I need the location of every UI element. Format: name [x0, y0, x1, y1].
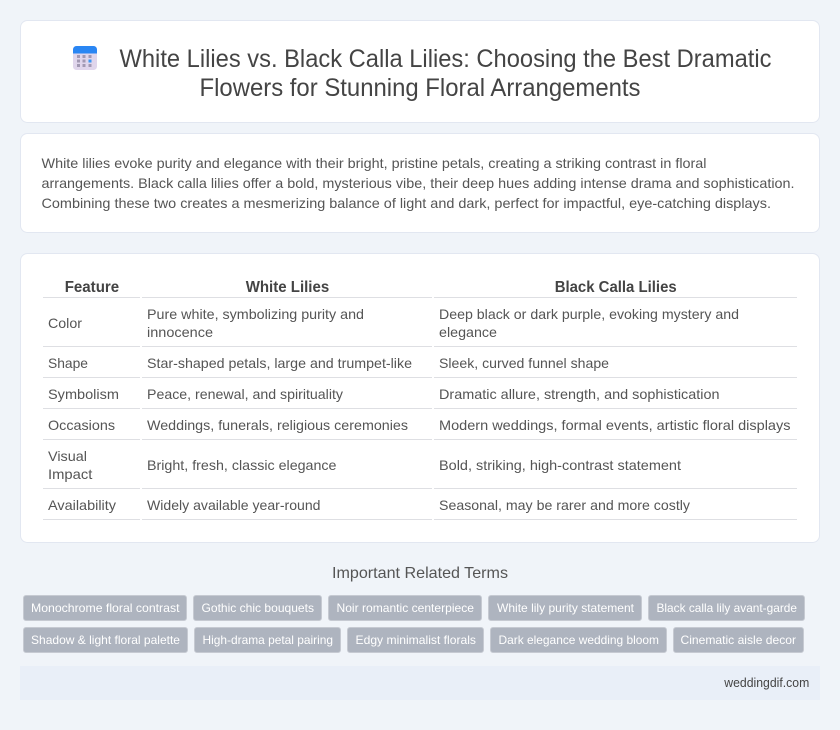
row: color: elegance	[439, 324, 497, 340]
row: symbolism	[43, 386, 797, 409]
row: shape: Sleek, curved funnel shape	[439, 355, 609, 371]
row: availability	[43, 497, 797, 520]
tag: Monochrome floral contrast	[31, 601, 180, 615]
tag: Noir romantic centerpiece	[336, 601, 474, 615]
row: visual impact: Impact	[48, 466, 92, 482]
row: occasions: Modern weddings, formal events, artistic floral displays	[439, 417, 790, 433]
row: color	[43, 306, 797, 347]
panel: intro paragraph: arrangements. Black calla lilies offer a bold, mysterious vibe, their deep hues adding intense drama and sophistication.	[42, 175, 794, 191]
tag	[490, 628, 666, 652]
tag	[194, 628, 340, 652]
row: occasions: Weddings, funerals, religious ceremonies	[147, 417, 408, 433]
heading: important related terms: Important Related Terms	[332, 565, 508, 582]
footer: weddingdif.com	[723, 676, 809, 690]
row: occasions	[43, 417, 797, 440]
tag: High-drama petal pairing	[202, 633, 333, 647]
icon: calendar	[73, 46, 97, 70]
row: availability: Availability	[48, 497, 116, 513]
row: color: Deep black or dark purple, evoking mystery and	[439, 306, 739, 322]
row: visual impact: Visual	[48, 448, 87, 464]
tag: Shadow & light floral palette	[31, 633, 180, 647]
row: symbolism: Dramatic allure, strength, and sophistication	[439, 386, 720, 402]
tag: Gothic chic bouquets	[202, 601, 314, 615]
title: White Lilies vs. Black Calla Lilies: Choosing the Best Dramatic	[120, 45, 772, 73]
tag: Dark elegance wedding bloom	[498, 633, 659, 647]
tag	[194, 596, 322, 620]
panel: header	[20, 20, 820, 122]
row: visual impact	[43, 448, 797, 489]
row: availability: Seasonal, may be rarer and more costly	[439, 497, 690, 513]
table header row: White Lilies	[246, 279, 329, 296]
row: availability: Widely available year-round	[147, 497, 320, 513]
tag	[674, 628, 804, 652]
tag	[348, 628, 484, 652]
panel: comparison table	[20, 254, 820, 542]
title	[120, 45, 772, 102]
tag: Edgy minimalist florals	[356, 633, 476, 647]
row: shape	[43, 355, 797, 378]
row: symbolism: Peace, renewal, and spirituality	[147, 386, 343, 402]
table header row: Black Calla Lilies	[555, 279, 677, 296]
row: shape: Star-shaped petals, large and trumpet-like	[147, 355, 412, 371]
row: visual impact: Bold, striking, high-contrast statement	[439, 457, 681, 473]
panel: intro paragraph: Combining these two creates a mesmerizing balance of light and dark, perfect for impactful, eye-catching displays.	[42, 195, 771, 211]
row: symbolism: Symbolism	[48, 386, 119, 402]
tag: White lily purity statement	[497, 601, 635, 615]
table header row	[43, 279, 797, 298]
row: shape: Shape	[48, 355, 88, 371]
title: Flowers for Stunning Floral Arrangements	[200, 74, 640, 102]
tag: Black calla lily avant-garde	[656, 601, 797, 615]
tag: Cinematic aisle decor	[680, 633, 796, 647]
table header row: Feature	[65, 279, 120, 296]
row: color: innocence	[147, 324, 213, 340]
tag	[328, 596, 482, 620]
panel: intro paragraph	[20, 134, 820, 232]
row: occasions: Occasions	[48, 417, 115, 433]
tag	[648, 596, 804, 620]
row: color: Pure white, symbolizing purity and	[147, 306, 364, 322]
row: visual impact: Bright, fresh, classic elegance	[147, 457, 337, 473]
row: color: Color	[48, 315, 82, 331]
panel: intro paragraph: White lilies evoke purity and elegance with their bright, pristine petals, creating a striking contrast in floral	[42, 155, 706, 171]
tag	[24, 628, 188, 652]
tag list	[24, 596, 804, 652]
tag	[24, 596, 186, 620]
footer	[20, 666, 820, 700]
tag	[488, 596, 642, 620]
